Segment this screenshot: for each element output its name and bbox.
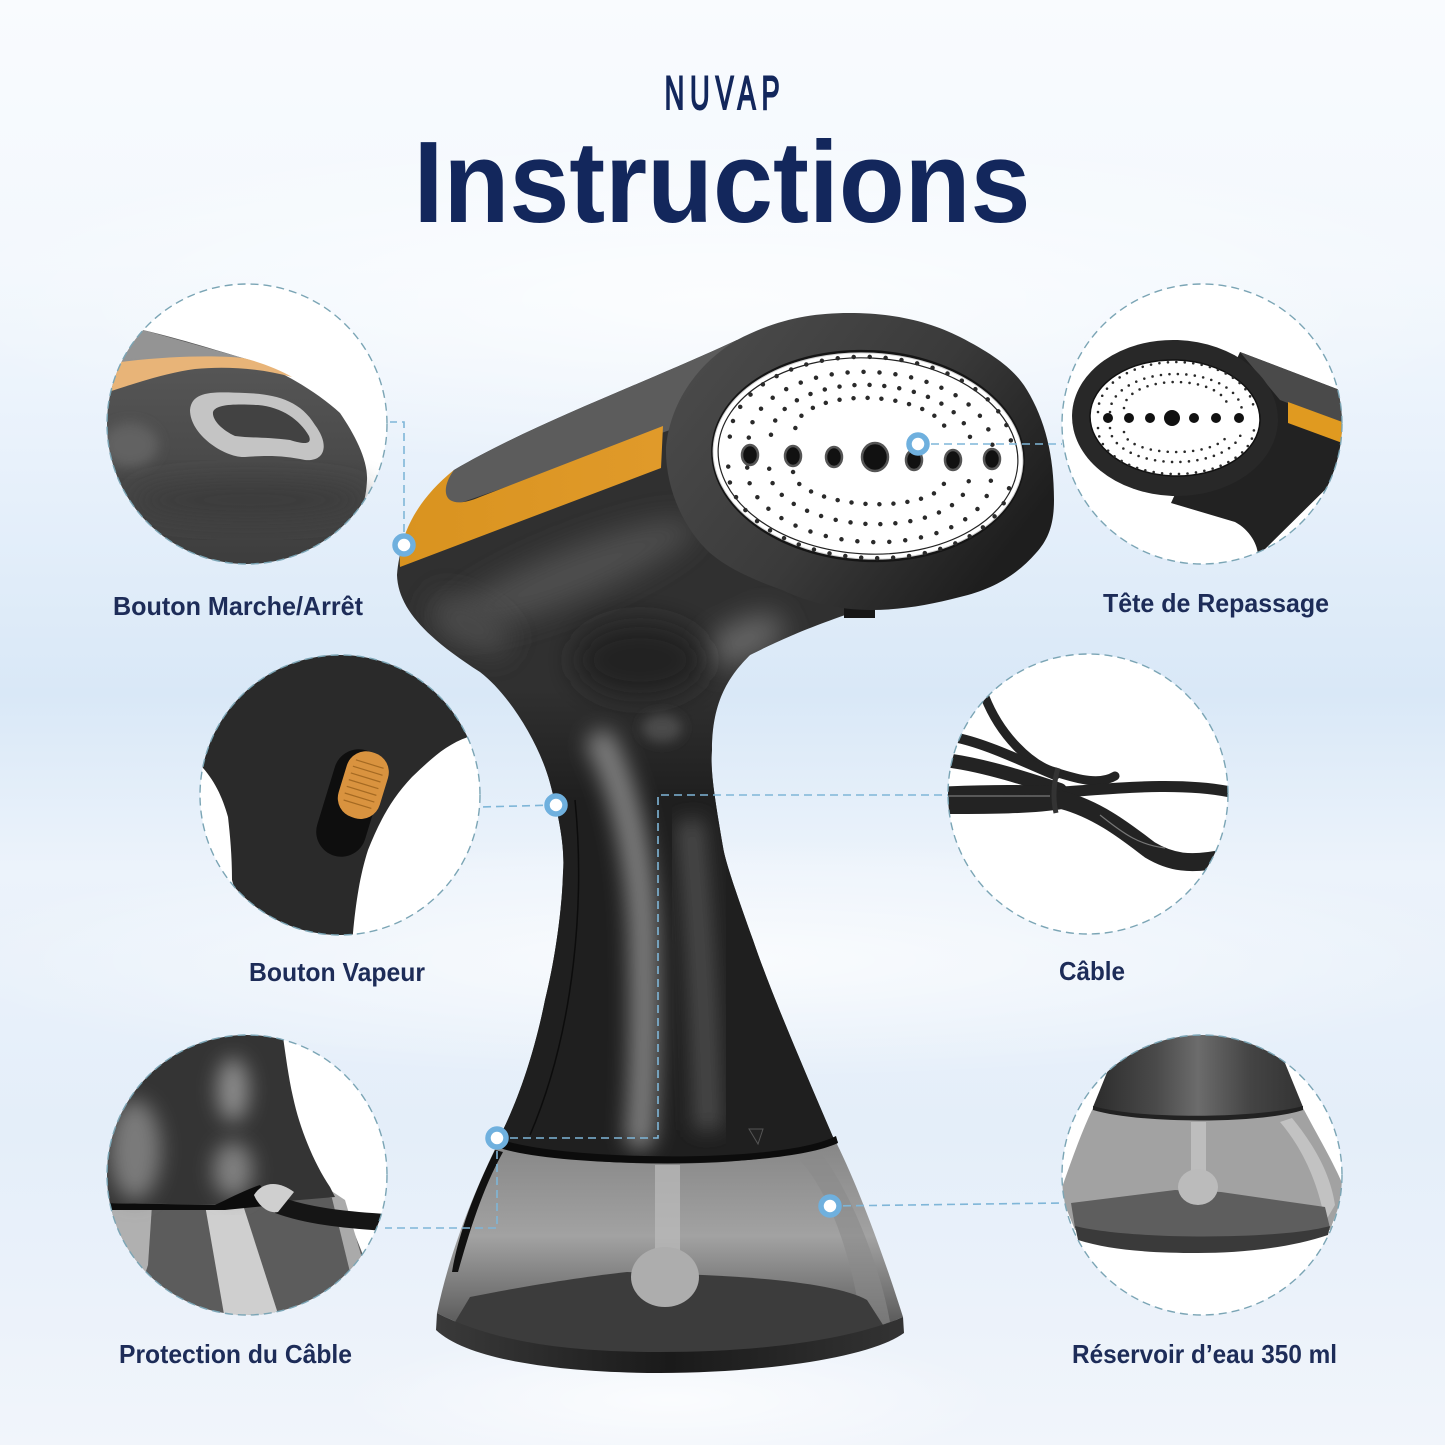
peach stripe: [108, 356, 292, 392]
steam dot rows: [724, 350, 1016, 565]
base ring: [436, 1313, 904, 1373]
tank right band: [800, 1152, 890, 1332]
marker dots: [395, 435, 927, 1215]
connector lines: [385, 422, 1062, 1228]
tank left edge: [452, 1150, 503, 1272]
cable highlights: [945, 796, 1165, 848]
panel: water tank: [1060, 1030, 1345, 1315]
tank stem: [655, 1165, 680, 1250]
orange band: [400, 426, 663, 567]
orange stripe: [1288, 402, 1345, 444]
orange slider: [316, 749, 389, 857]
tank: [437, 1140, 903, 1354]
mini cone: [1093, 1030, 1303, 1118]
mini holes: [1103, 410, 1244, 426]
collar: [500, 1136, 838, 1163]
mini floor: [1071, 1190, 1330, 1237]
steamer product: [397, 313, 1054, 1373]
silver power button: [190, 392, 324, 460]
panel: cable: [945, 654, 1235, 934]
steam plate: [706, 342, 1030, 570]
large steam holes: [742, 443, 1000, 471]
label: steam button: Bouton Vapeur: [249, 957, 425, 987]
steamer neck and body: [397, 340, 844, 1164]
head ring: [666, 313, 1054, 610]
panel: steam button: [199, 654, 481, 936]
panel: cable protection: [106, 1034, 388, 1316]
arrow mark: [749, 1129, 763, 1144]
cable: [278, 1205, 395, 1223]
button inner: [213, 405, 310, 443]
head tab: [844, 606, 875, 618]
label: cable: Câble: [1059, 956, 1125, 986]
panel: on/off button: [100, 284, 387, 590]
neck highlight streaks: [602, 745, 644, 1135]
brand logo: NUVAP: [665, 67, 785, 120]
label: water tank: Réservoir d’eau 350 ml: [1072, 1339, 1337, 1369]
label: cable protection: Protection du Câble: [119, 1339, 352, 1369]
mini base: [1075, 1226, 1330, 1253]
label: ironing head: Tête de Repassage: [1103, 588, 1329, 618]
label: on/off button: Bouton Marche/Arrêt: [113, 591, 363, 621]
mini tank body: [1060, 1108, 1345, 1230]
title: Instructions: [414, 117, 1030, 247]
cable sleeve: [254, 1184, 294, 1212]
tank floor: [455, 1272, 885, 1354]
tank float: [631, 1247, 699, 1307]
tank section: [100, 1197, 365, 1320]
panel: ironing head: [1062, 284, 1345, 564]
mini dot rows: [1098, 362, 1254, 474]
cable tie: [1054, 768, 1058, 813]
